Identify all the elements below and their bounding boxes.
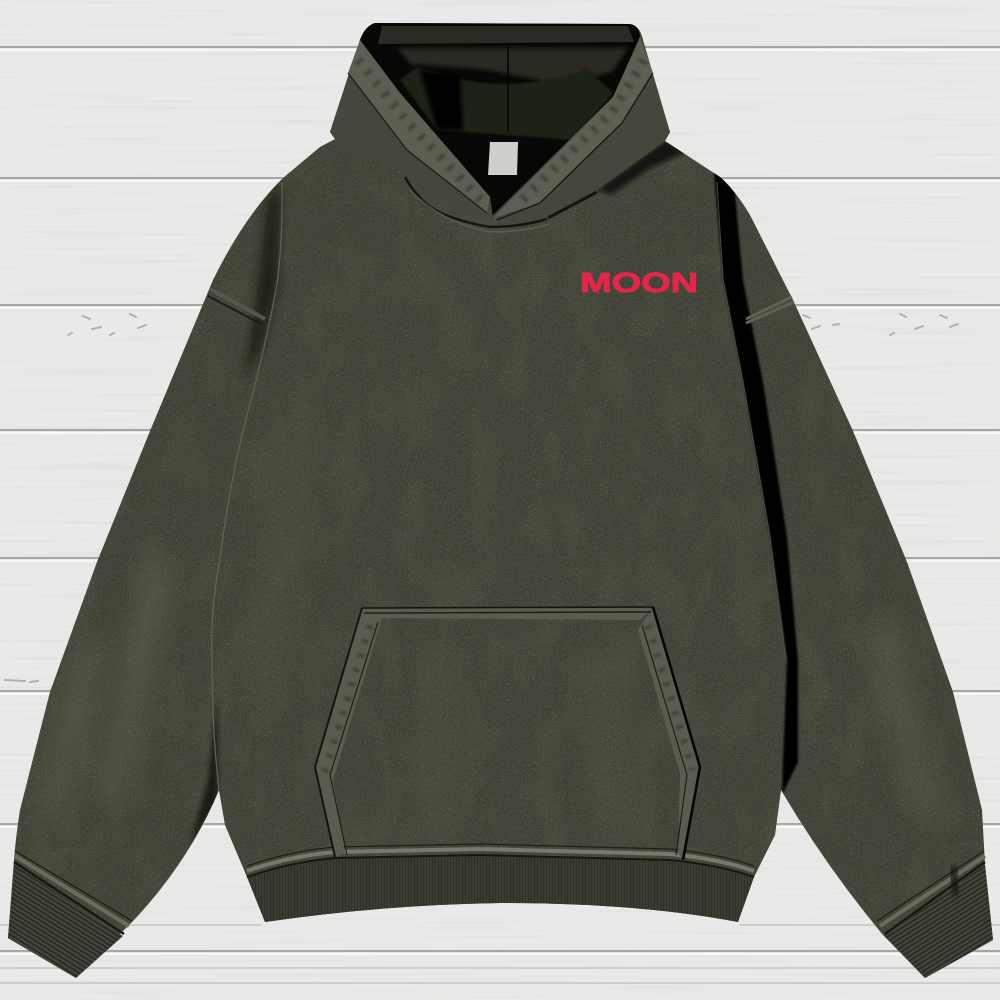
neck seam — [405, 177, 597, 232]
right side black shadow band — [714, 172, 798, 795]
kangaroo pocket — [315, 607, 700, 860]
hem seam — [247, 844, 754, 877]
left sleeve fold shadow — [245, 185, 280, 380]
right hood stitched band — [493, 37, 653, 218]
right cuff seam — [877, 851, 985, 934]
left cuff seam — [14, 851, 132, 934]
neck label — [488, 142, 518, 175]
left hood stitched band — [348, 40, 490, 213]
right hood flap — [490, 37, 670, 220]
shadow beneath right hood flap — [597, 141, 690, 194]
left shoulder seam — [208, 289, 265, 325]
body edge highlight on left — [212, 182, 282, 790]
hem ribbing — [247, 855, 754, 922]
left cuff — [8, 865, 123, 978]
chest logo: MOON — [580, 267, 698, 298]
left hood flap — [330, 40, 490, 218]
inner neck panel — [400, 67, 613, 140]
hood top band — [378, 26, 634, 44]
right cuff — [885, 865, 993, 978]
body edge highlight on right — [717, 182, 786, 660]
pocket stitched bands — [315, 608, 382, 857]
hood interior — [360, 23, 640, 218]
hood inner lining — [398, 48, 628, 85]
right shoulder seam — [746, 297, 794, 323]
